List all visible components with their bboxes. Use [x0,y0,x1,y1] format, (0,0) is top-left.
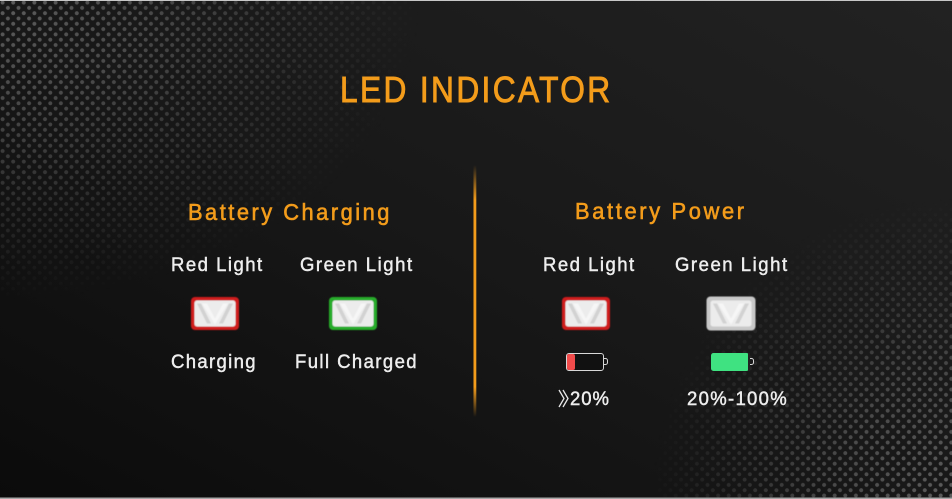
icon: low battery [566,354,608,370]
title: LED INDICATOR [340,70,610,110]
heading: battery charging: Battery Charging [188,199,389,225]
label: 20 to 100 percent: 20%-100% [687,389,787,410]
icon: unlit LED [706,296,756,330]
icon: red LED [562,297,610,330]
panel: battery power [543,198,788,410]
heading: battery power: Battery Power [575,198,745,224]
label: below 20 percent: 20% [570,389,609,410]
label: charging: Charging [171,352,256,373]
panel: battery charging [171,199,417,373]
icon: full battery [711,353,754,371]
icon: green LED [329,297,377,330]
label: green light: Green Light [300,255,413,276]
label: full charged: Full Charged [295,352,417,373]
divider line [474,165,476,417]
label: red light: Red Light [171,255,263,276]
icon: red LED [191,297,239,330]
label: red light: Red Light [543,255,635,276]
label: green light: Green Light [675,255,788,276]
